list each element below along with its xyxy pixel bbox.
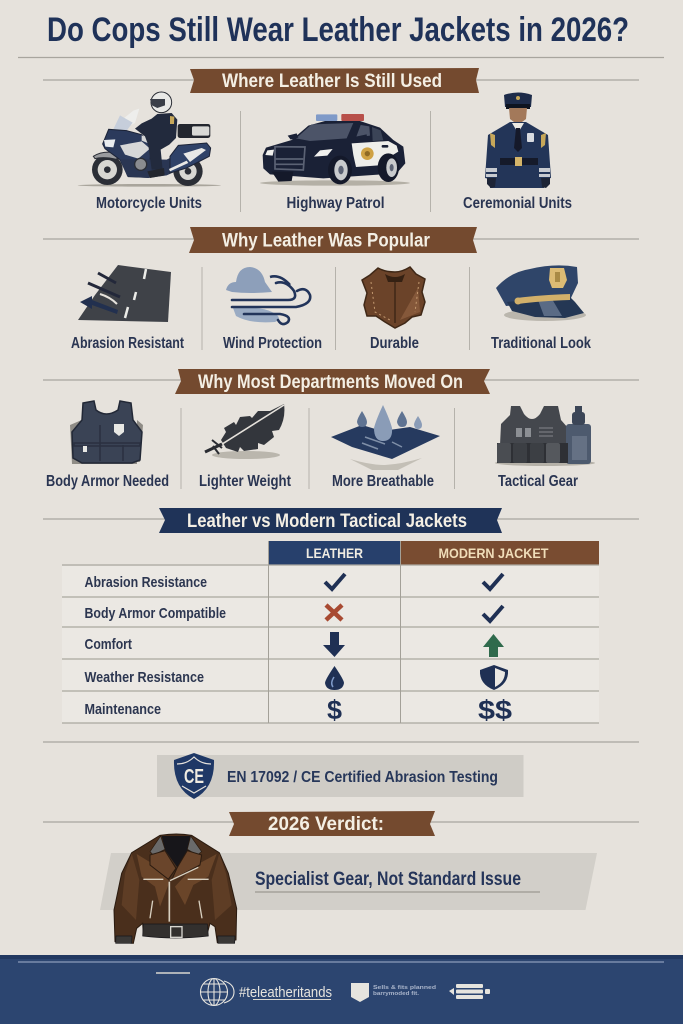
row: abrasion resistance: Abrasion Resistance: [84, 574, 207, 591]
icon: ce shield: CE: [184, 766, 204, 788]
callout: certification: [157, 753, 524, 799]
icon: breathable fabric: [331, 405, 440, 470]
row: maintenance: $$: [478, 695, 512, 725]
icon: tactical gear: [495, 406, 595, 466]
footer note: Sells & fits planned: [373, 985, 436, 991]
icon: wind: [226, 267, 310, 324]
comparison table: [62, 541, 599, 725]
row: maintenance: [84, 695, 512, 725]
icon: body armor vest: [70, 401, 143, 464]
icon: feather: [205, 404, 284, 459]
banner: where leather is still used: Where Leather Is Still Used: [222, 71, 442, 92]
label: body armor needed: Body Armor Needed: [46, 473, 169, 490]
row: maintenance: Maintenance: [84, 701, 161, 718]
label: traditional look: Traditional Look: [491, 335, 591, 352]
row: comfort: [84, 632, 504, 657]
icon: footer pencil: [449, 984, 490, 999]
callout: verdict: Specialist Gear, Not Standard Issue: [255, 869, 521, 890]
label: lighter weight: Lighter Weight: [199, 473, 291, 490]
label: tactical gear: Tactical Gear: [498, 473, 578, 490]
footer brand: #teleatheritands: [239, 984, 332, 1001]
icon: footer shield: [351, 983, 369, 1002]
callout: verdict: [100, 853, 597, 910]
header: leather: LEATHER: [306, 545, 363, 561]
banner: 2026 verdict: [229, 811, 435, 836]
label: abrasion resistant: Abrasion Resistant: [71, 335, 184, 352]
row: maintenance: $: [327, 695, 342, 725]
icon: abrasion road: [78, 265, 171, 322]
banner: leather vs modern tactical jackets: Leather vs Modern Tactical Jackets: [187, 511, 467, 532]
label: more breathable: More Breathable: [332, 473, 434, 490]
panel: why most departments moved on: [46, 401, 595, 490]
label: ceremonial units: Ceremonial Units: [463, 195, 572, 212]
row: weather resistance: Weather Resistance: [84, 669, 204, 686]
icon: leather jacket: [114, 834, 237, 943]
banner: why leather was popular: Why Leather Was Popular: [222, 230, 431, 252]
banner: why most departments moved on: Why Most Departments Moved On: [198, 372, 463, 393]
icon: police cap: [496, 265, 586, 321]
row: body armor compatible: [84, 605, 503, 622]
banner: 2026 verdict: 2026 Verdict:: [268, 814, 384, 835]
icon: leather hide: [362, 267, 425, 328]
icon: ce shield: [174, 753, 214, 799]
icon: motorcycle officer: [78, 92, 221, 187]
footer note: [373, 985, 436, 997]
panel: why leather was popular: [71, 265, 591, 352]
label: highway patrol: Highway Patrol: [286, 195, 384, 212]
footer note: barrymoded fit.: [373, 991, 420, 997]
icon: police car: [260, 114, 410, 186]
panel: where leather is still used: [78, 92, 572, 212]
row: abrasion resistance: [84, 574, 503, 591]
label: motorcycle units: Motorcycle Units: [96, 195, 202, 212]
banner: why leather was popular: [189, 227, 477, 253]
row: body armor compatible: Body Armor Compatible: [84, 605, 226, 622]
label: wind protection: Wind Protection: [223, 335, 322, 352]
icon: globe: [200, 978, 234, 1006]
header: modern jacket: MODERN JACKET: [438, 545, 549, 561]
icon: ceremonial officer: [485, 92, 551, 188]
header: modern jacket: [401, 541, 599, 565]
label: durable: Durable: [370, 335, 419, 352]
row: comfort: Comfort: [84, 636, 132, 653]
header: leather: [268, 541, 400, 565]
callout: certification: EN 17092 / CE Certified Abrasion Testing: [227, 769, 498, 786]
row: weather resistance: [84, 665, 508, 690]
footer: [0, 955, 683, 1024]
